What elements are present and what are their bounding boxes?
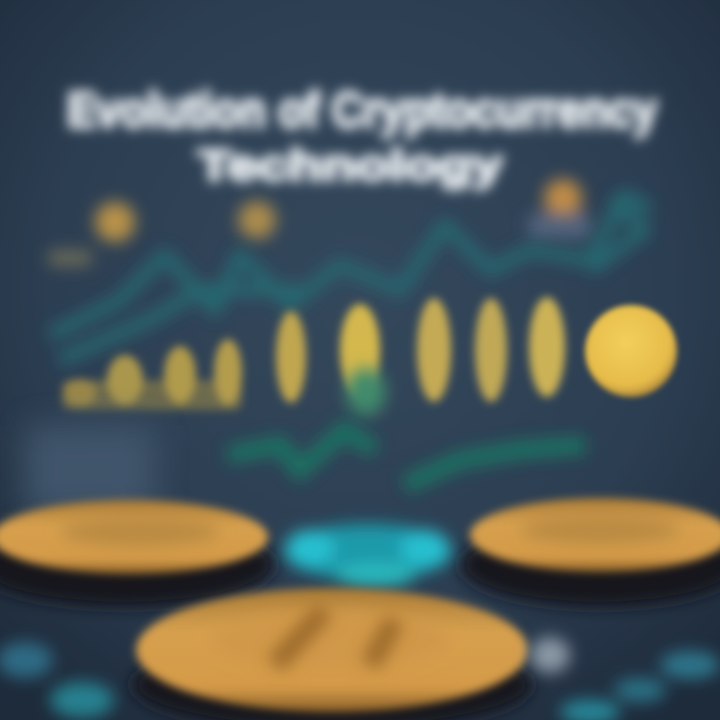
- left grey block: [25, 425, 155, 515]
- dish: centre: [132, 588, 532, 720]
- title: [67, 82, 657, 190]
- dish symbol: [275, 610, 395, 665]
- green lower chart: [228, 430, 585, 485]
- title: Technology: [198, 141, 503, 190]
- teal coin accent: [346, 368, 386, 416]
- cyan centre shape: [284, 524, 452, 587]
- dish: left: [0, 500, 275, 607]
- small icons: orange circles: [48, 179, 592, 266]
- bottom cyan fragments: [0, 637, 720, 720]
- dish: right: [460, 498, 720, 607]
- row of coins: [62, 297, 565, 410]
- teal line chart: [50, 195, 650, 360]
- large coin: [585, 305, 677, 397]
